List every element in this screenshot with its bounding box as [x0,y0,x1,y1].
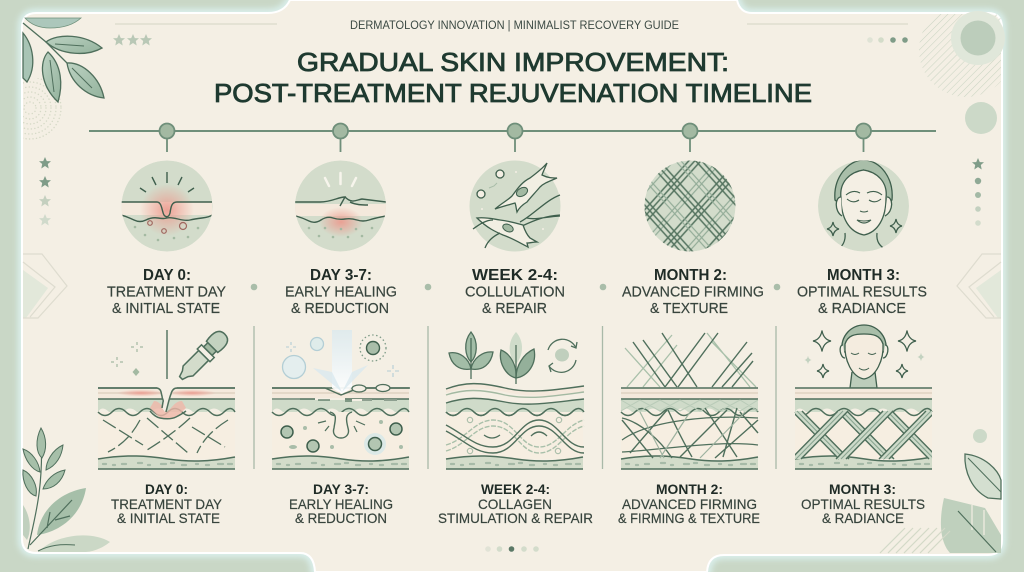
label: day 0 upper: & INITIAL STATE [112,301,220,317]
label: month 3 lower [801,481,925,526]
label: month 2 upper: & TEXTURE [650,301,728,317]
header tagline: DERMATOLOGY INNOVATION | MINIMALIST RECOVERY GUIDE [350,20,679,32]
title [214,49,812,108]
icon: small face [840,325,888,388]
timeline [89,124,936,152]
icon: month 2 collagen mesh [644,160,736,252]
icon: dropper [175,328,231,384]
decoration: bottom pager dots [485,546,539,552]
column dividers and dots [251,284,780,469]
diagram: month 2 skin cross-section with firming mesh [621,333,758,469]
decoration: left chevrons [23,254,67,318]
icon: week 2-4 fibroblast cells [470,160,560,252]
label: day 0 lower: & INITIAL STATE [117,510,220,526]
label: month 3 upper: & RADIANCE [818,301,906,317]
decoration: top-left leaves and dots [22,18,105,140]
label: week 2-4 upper: WEEK 2-4: [472,267,558,284]
decoration: right chevrons [957,254,1001,318]
label: week 2-4 lower: COLLAGEN [478,496,552,512]
label: month 2 lower [618,481,760,526]
label: day 0 upper: DAY 0: [143,267,191,284]
decoration: right star and dots [972,158,984,226]
label: month 2 lower: ADVANCED FIRMING [622,496,757,512]
label: month 3 upper [797,267,927,317]
label: month 2 lower: & FIRMING & TEXTURE [618,510,760,526]
label: month 3 lower: & RADIANCE [822,510,904,526]
decoration: top-left rule and stars [113,24,277,46]
label: day 3-7 upper [285,267,397,317]
label: week 2-4 upper: & REPAIR [482,301,547,317]
icon: day 0 irritated skin [121,160,212,252]
label: day 3-7 upper: & REDUCTION [291,301,389,317]
icon: renewal arrows [548,339,577,372]
label: day 3-7 lower [289,481,393,526]
label: day 3-7 upper: DAY 3-7: [310,267,372,284]
label: day 3-7 lower: & REDUCTION [295,510,387,526]
title: GRADUAL SKIN IMPROVEMENT: [297,49,729,77]
label: month 3 upper: MONTH 3: [827,267,900,284]
label: month 3 lower: MONTH 3: [829,481,896,497]
icon: month 3 radiant face [818,160,909,252]
label: month 2 upper: MONTH 2: [654,267,727,284]
icon: plants [449,332,535,384]
label: month 3 upper: OPTIMAL RESULTS [797,284,927,300]
diagram: month 3 skin cross-section with face [791,325,939,469]
diagram: week 2-4 skin cross-section with plants [446,332,584,469]
label: day 3-7 lower: EARLY HEALING [289,496,393,512]
label: day 0 lower: DAY 0: [145,481,188,497]
label: day 0 upper [107,267,226,317]
diagram: day 3-7 skin cross-section with light beam [272,330,410,469]
decoration: top-right circles and hatching [747,11,1005,134]
label: week 2-4 lower: WEEK 2-4: [481,481,550,497]
label: month 2 upper: ADVANCED FIRMING [622,284,764,300]
decoration: bottom-right leaves [880,429,1001,553]
label: week 2-4 upper: COLLULATION [465,284,565,300]
label: week 2-4 upper [465,267,565,317]
label: day 0 upper: TREATMENT DAY [107,284,226,300]
decoration: bottom-left plant [23,428,110,552]
label: week 2-4 lower: STIMULATION & REPAIR [438,510,593,526]
timeline nodes [160,124,871,152]
label: day 3-7 upper: EARLY HEALING [285,284,397,300]
title: POST-TREATMENT REJUVENATION TIMELINE [214,80,812,108]
label: day 0 lower [111,481,223,526]
label: month 2 upper [622,267,764,317]
label: week 2-4 lower [438,481,593,526]
label: day 0 lower: TREATMENT DAY [111,496,223,512]
label: day 3-7 lower: DAY 3-7: [313,481,369,497]
decoration: left stars [39,157,51,226]
label: month 3 lower: OPTIMAL RESULTS [801,496,925,512]
diagram: day 0 skin cross-section with dropper [98,328,235,469]
label: month 2 lower: MONTH 2: [656,481,723,497]
icon: day 3-7 healing skin [295,160,386,252]
